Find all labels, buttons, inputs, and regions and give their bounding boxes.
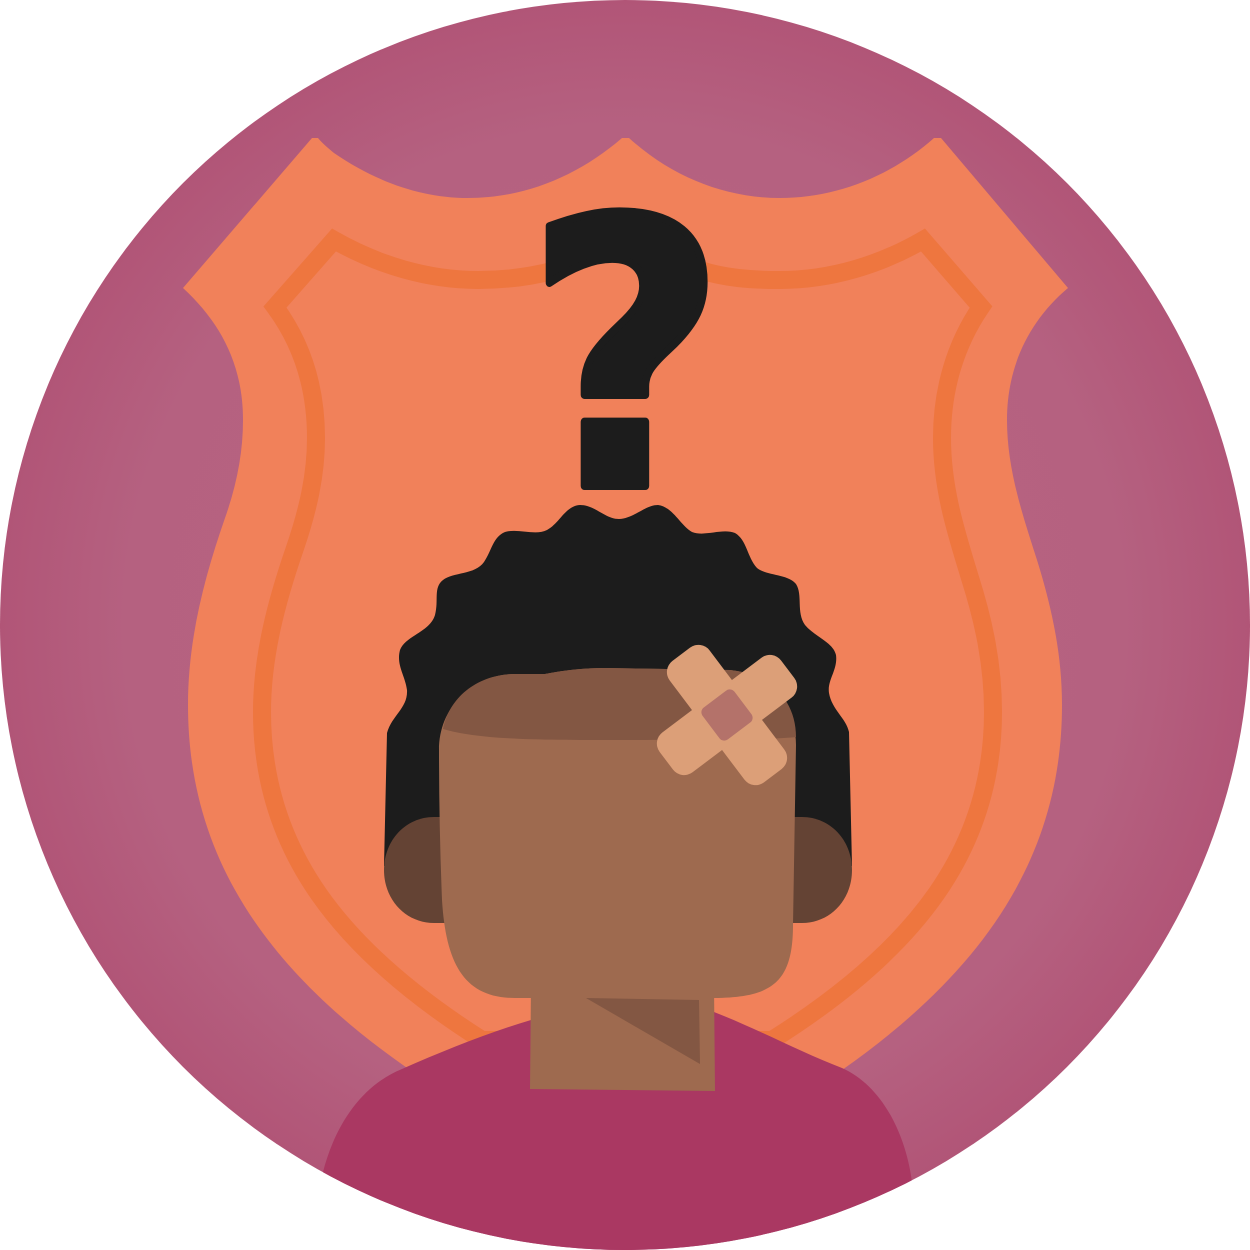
forehead shadow	[443, 668, 796, 740]
shirt	[323, 1012, 912, 1250]
face	[439, 668, 796, 998]
left ear	[384, 817, 446, 923]
neck	[530, 998, 715, 1091]
bandage pad	[701, 689, 753, 741]
badge shield	[183, 138, 1068, 1070]
hair	[384, 505, 852, 866]
question mark: ?	[526, 144, 726, 574]
person	[323, 505, 912, 1250]
shield inner outline	[262, 240, 993, 1040]
right ear	[790, 817, 852, 923]
shield body	[183, 138, 1068, 1070]
bandage strip one	[666, 644, 788, 786]
neck shadow	[586, 998, 700, 1064]
bandage strip two	[656, 654, 798, 776]
bandage	[656, 644, 798, 786]
